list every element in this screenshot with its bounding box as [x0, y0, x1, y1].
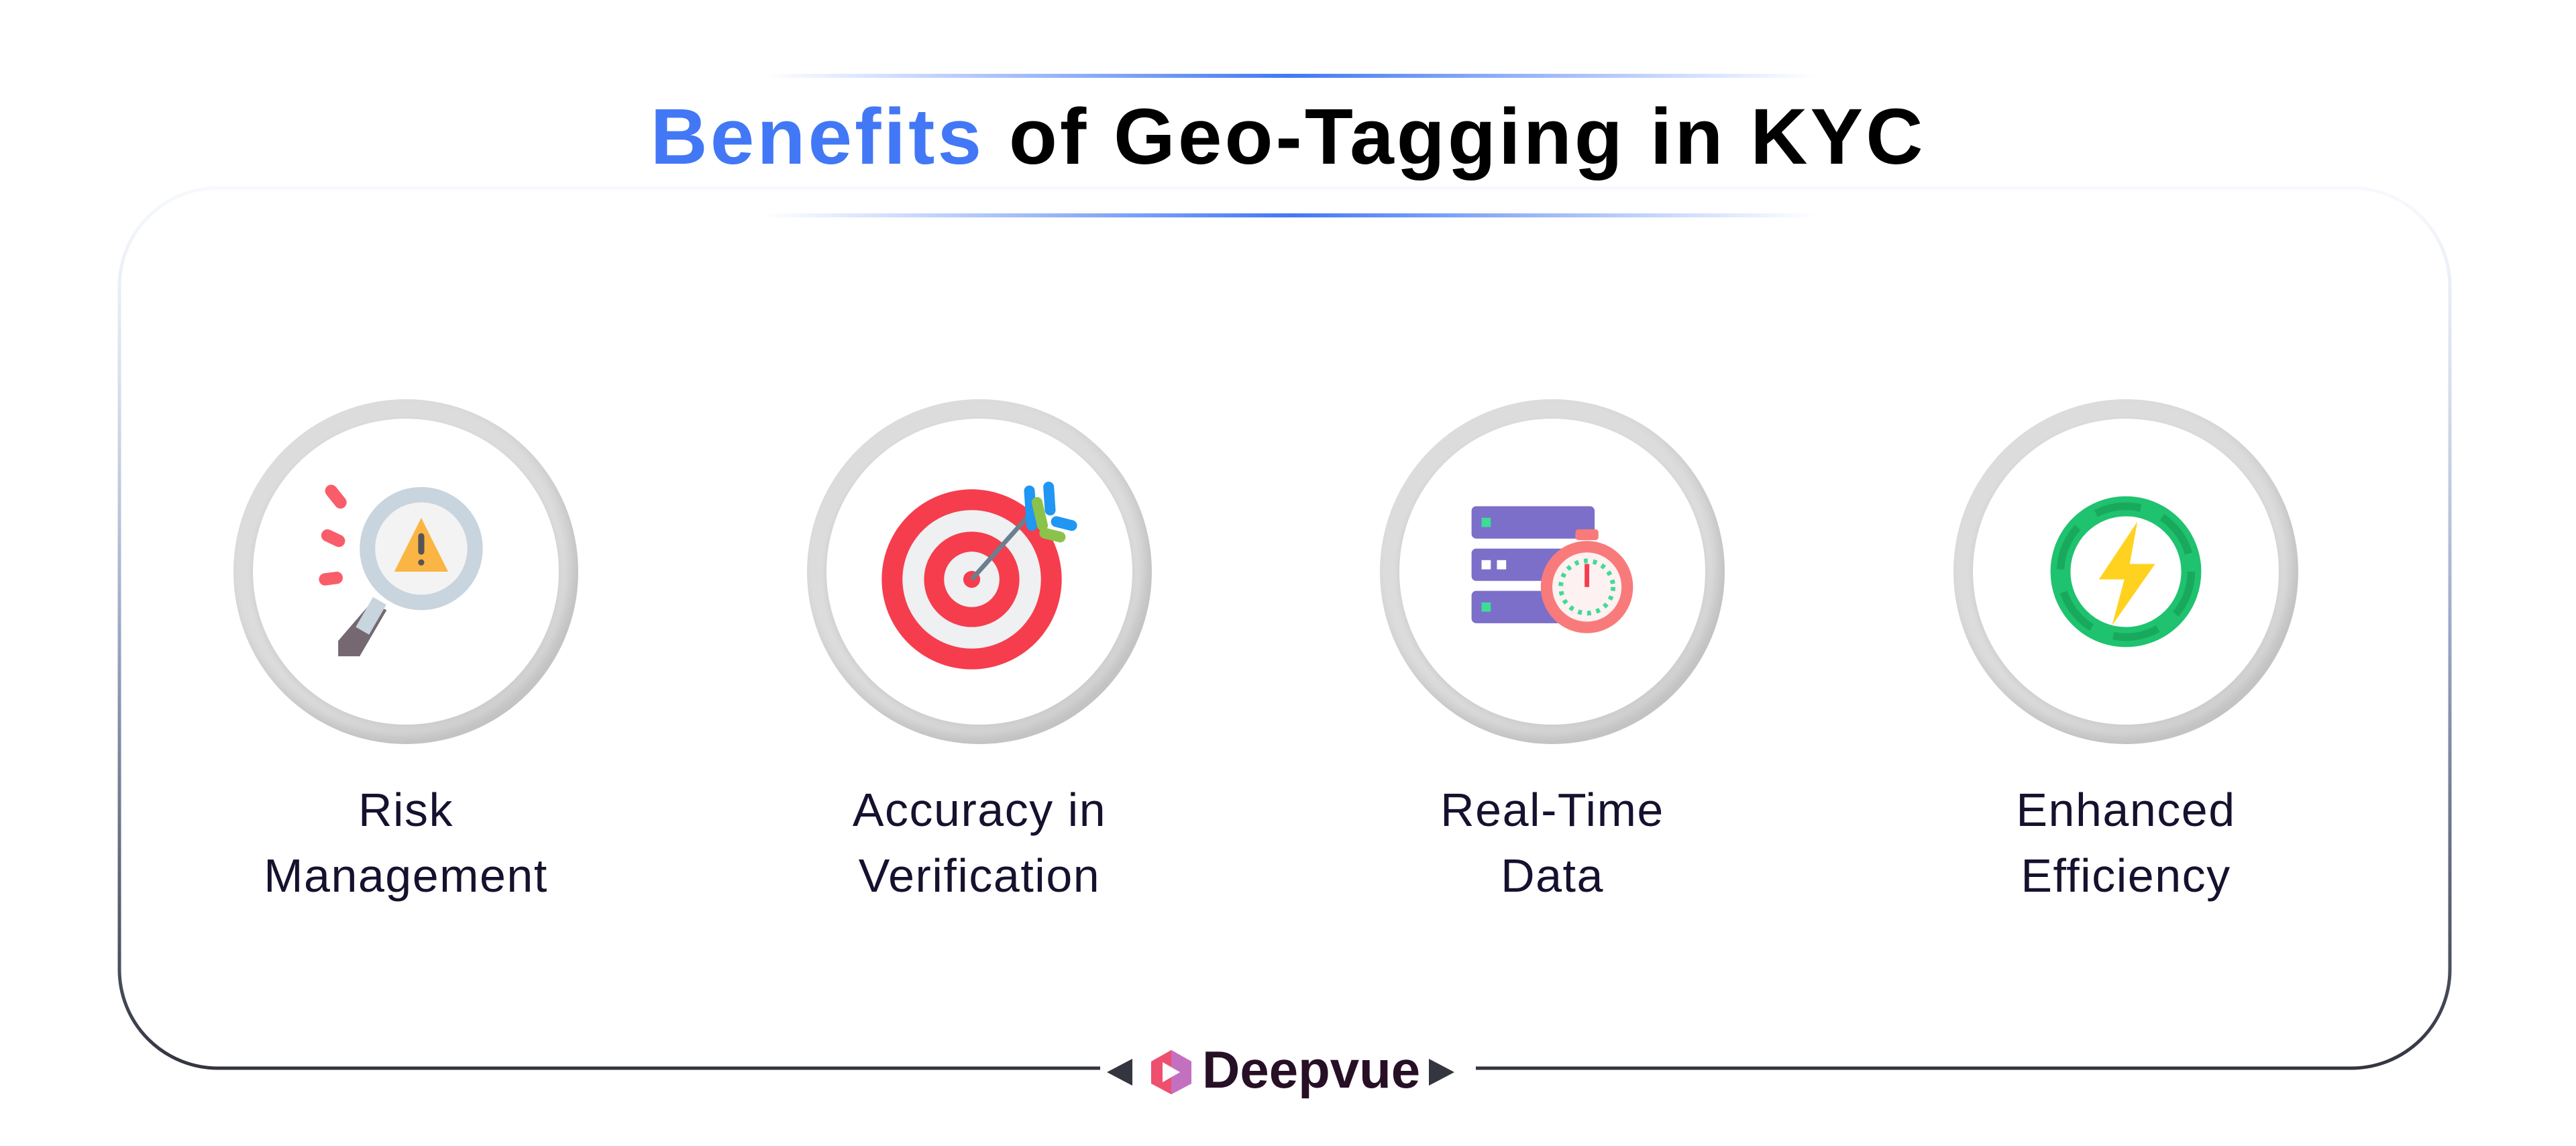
logo hexagon [1151, 1050, 1191, 1094]
label: Management [264, 849, 548, 902]
label [1440, 784, 1664, 902]
icon circle: target [807, 399, 1152, 744]
item: real-time data [1380, 399, 1725, 902]
title top line [764, 74, 1815, 78]
logo text: Deepvue [1202, 1040, 1420, 1099]
label: Enhanced [2016, 784, 2236, 836]
footer logo [1100, 1037, 1476, 1104]
title bottom line [764, 213, 1815, 217]
title: Benefits of Geo-Tagging in KYC [651, 93, 1925, 181]
label: Efficiency [2021, 849, 2231, 902]
label: Verification [859, 849, 1100, 902]
icon circle: magnifier warning [233, 399, 578, 744]
label [853, 784, 1106, 902]
item: risk management [233, 399, 578, 902]
label [264, 784, 548, 902]
label: Accuracy in [853, 784, 1106, 836]
arrow right [1429, 1059, 1454, 1086]
item: accuracy in verification [807, 399, 1152, 902]
label: Risk [358, 784, 453, 836]
label [2016, 784, 2236, 902]
item: enhanced efficiency [1953, 399, 2298, 902]
arrow left [1107, 1059, 1132, 1086]
label: Real-Time [1440, 784, 1664, 836]
icon circle: server with stopwatch [1380, 399, 1725, 744]
icon circle: lightning cycle [1953, 399, 2298, 744]
label: Data [1501, 849, 1604, 902]
